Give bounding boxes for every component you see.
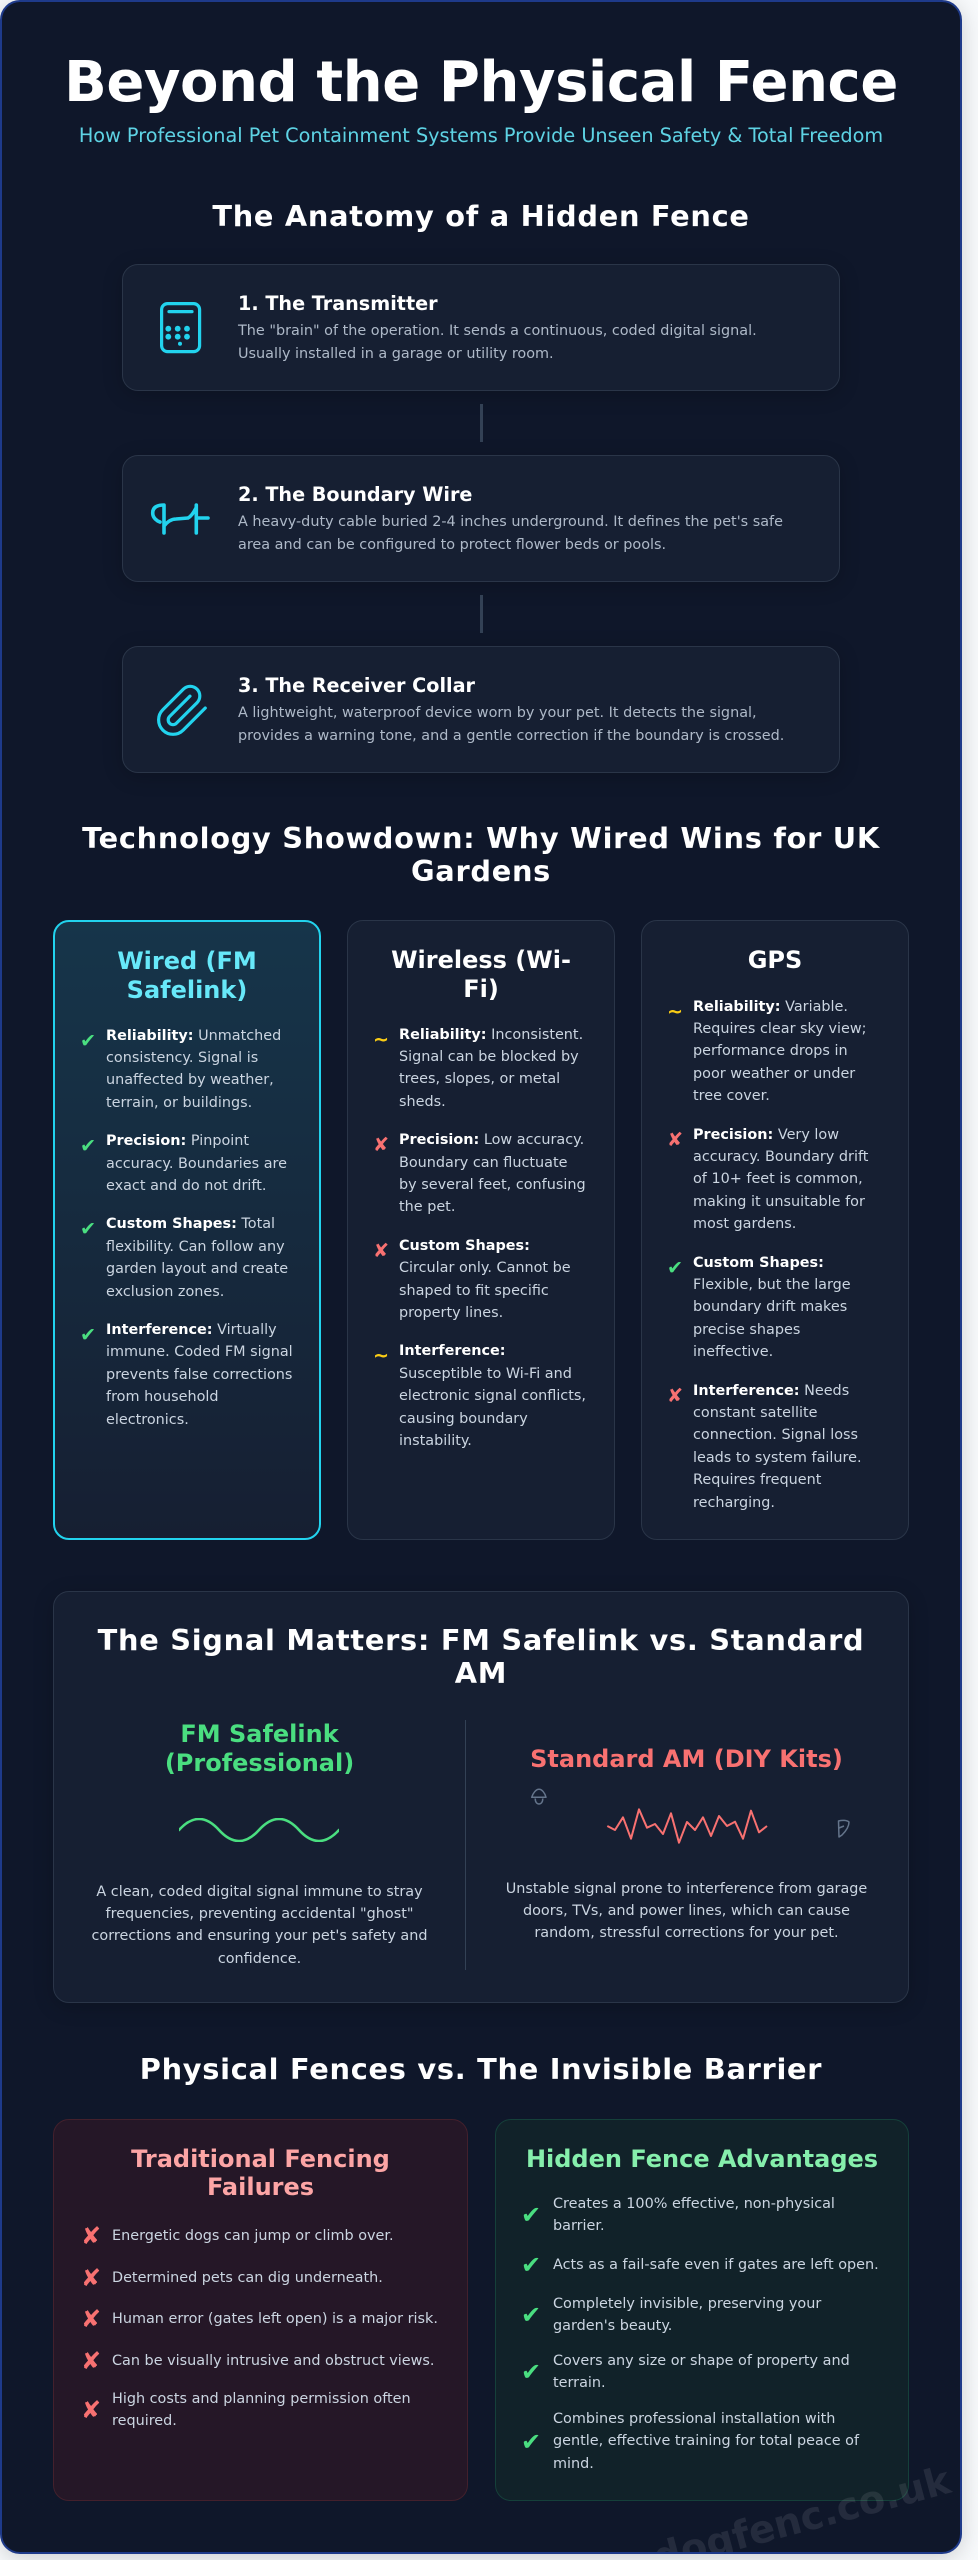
- feature list: terrain, or buildings.: [106, 1095, 252, 1111]
- failures list: ✘: [81, 2305, 101, 2333]
- feature list: trees, slopes, or metal: [399, 1071, 560, 1087]
- panel: GPS column: ✘: [667, 1384, 683, 1407]
- feature list: the pet.: [399, 1199, 455, 1215]
- failures list: Energetic dogs can jump or climb over.: [112, 2228, 394, 2244]
- feature list: Signal can be blocked by: [399, 1049, 579, 1065]
- feature list: from household: [106, 1389, 219, 1405]
- card description: [238, 323, 757, 362]
- panel heading: [131, 2144, 390, 2201]
- card title: 1. The Transmitter: [238, 292, 438, 314]
- feature list: consistency. Signal is: [106, 1050, 258, 1066]
- column heading: Wired (FM: [117, 947, 257, 975]
- column heading: Fi): [463, 975, 499, 1003]
- column heading: GPS: [748, 946, 802, 974]
- feature list: making it unsuitable for: [693, 1194, 865, 1210]
- feature list: flexibility. Can follow any: [106, 1239, 285, 1255]
- failures list: ✘: [81, 2396, 101, 2424]
- AM description: [506, 1880, 867, 1941]
- panel: boundary wire: [122, 455, 840, 582]
- feature list: tree cover.: [693, 1088, 770, 1104]
- feature list: recharging.: [693, 1495, 775, 1511]
- icon: boundary wire: [150, 503, 210, 535]
- card description: The "brain" of the operation. It sends a continuous, coded digital signal.: [238, 323, 757, 339]
- subtitle: How Professional Pet Containment Systems Provide Unseen Safety & Total Freedom: [79, 124, 883, 147]
- AM noisy signal: [606, 1808, 768, 1844]
- panel: GPS column: ~: [667, 1000, 683, 1022]
- feature list: [373, 1027, 586, 1449]
- heading: signal matters: [98, 1623, 864, 1690]
- advantages list: Combines professional installation with: [553, 2411, 835, 2427]
- AM description: Unstable signal prone to interference from garage: [506, 1880, 867, 1896]
- FM description: confidence.: [218, 1951, 301, 1967]
- FM description: A clean, coded digital signal immune to stray: [96, 1884, 423, 1900]
- feature list: Circular only. Cannot be: [399, 1260, 571, 1276]
- advantages list: ✔: [521, 2301, 541, 2329]
- feature list: accuracy. Boundary drift: [693, 1149, 868, 1165]
- panel: hidden fence advantages: [495, 2119, 909, 2501]
- advantages list: ✔: [521, 2201, 541, 2229]
- panel: signal comparison: [53, 1591, 909, 2003]
- icon: paperclip collar: [157, 684, 207, 736]
- feature list: Susceptible to Wi-Fi and: [399, 1366, 572, 1382]
- panel: GPS column: [641, 920, 909, 1540]
- feature list: most gardens.: [693, 1216, 796, 1232]
- feature list: Flexible, but the large: [693, 1277, 851, 1293]
- feature list: accuracy. Boundaries are: [106, 1156, 287, 1172]
- panel: wireless column: ~: [373, 1028, 389, 1051]
- advantages list: ✔: [521, 2358, 541, 2386]
- panel: wireless column: ✘: [373, 1133, 389, 1156]
- feature list: causing boundary: [399, 1411, 528, 1427]
- feature list: leads to system failure.: [693, 1450, 862, 1466]
- panel: wireless column: [347, 920, 615, 1540]
- panel heading: Traditional Fencing: [131, 2144, 390, 2172]
- column heading: [117, 947, 257, 1004]
- FM heading: [165, 1720, 354, 1777]
- panel: wired column: [53, 920, 321, 1540]
- advantages list: barrier.: [553, 2218, 605, 2234]
- panel: wired column: ✔: [80, 1134, 96, 1157]
- title: Beyond the Physical Fence: [64, 50, 898, 115]
- feature list: boundary drift makes: [693, 1299, 847, 1315]
- feature list: exclusion zones.: [106, 1284, 224, 1300]
- feature list: immune. Coded FM signal: [106, 1344, 293, 1360]
- feature list: Interference:: [399, 1343, 506, 1359]
- feature list: electronic signal conflicts,: [399, 1388, 586, 1404]
- feature list: [667, 998, 868, 1511]
- failures list: ✘: [81, 2222, 101, 2250]
- feature list: constant satellite: [693, 1405, 817, 1421]
- column heading: Safelink): [127, 976, 247, 1004]
- advantages list: garden's beauty.: [553, 2318, 672, 2334]
- feature list: Precision: Low accuracy.: [399, 1132, 584, 1148]
- feature list: Reliability: Variable.: [693, 998, 848, 1014]
- panel: wireless column: ~: [373, 1344, 389, 1367]
- feature list: sheds.: [399, 1094, 446, 1110]
- feature list: precise shapes: [693, 1322, 800, 1338]
- advantages list: [521, 2196, 879, 2472]
- advantages list: Creates a 100% effective, non-physical: [553, 2196, 835, 2212]
- feature list: [80, 1028, 293, 1428]
- card description: area and can be configured to protect flower beds or pools.: [238, 537, 666, 553]
- icon: transmitter: [160, 302, 202, 354]
- panel: wired column: ✔: [80, 1028, 96, 1052]
- advantages list: Acts as a fail-safe even if gates are left open.: [553, 2257, 879, 2273]
- failures list: ✘: [81, 2264, 101, 2292]
- card description: Usually installed in a garage or utility room.: [238, 346, 554, 362]
- feature list: of 10+ feet is common,: [693, 1171, 863, 1187]
- AM heading: Standard AM (DIY Kits): [530, 1745, 843, 1773]
- feature list: prevents false corrections: [106, 1367, 292, 1383]
- panel: transmitter: [122, 264, 840, 391]
- panel: wired column: ✔: [80, 1323, 96, 1346]
- feature list: Requires frequent: [693, 1472, 821, 1488]
- advantages list: Completely invisible, preserving your: [553, 2296, 821, 2312]
- heading: technology showdown: Gardens: [411, 854, 551, 888]
- feature list: performance drops in: [693, 1043, 848, 1059]
- card description: A heavy-duty cable buried 2-4 inches underground. It defines the pet's safe: [238, 514, 783, 530]
- advantages list: mind.: [553, 2456, 594, 2472]
- column heading: [391, 946, 571, 1003]
- feature list: garden layout and create: [106, 1261, 288, 1277]
- feature list: poor weather or under: [693, 1066, 855, 1082]
- FM description: corrections and ensuring your pet's safety and: [91, 1928, 428, 1944]
- feature list: Custom Shapes:: [693, 1255, 824, 1271]
- AM description: doors, TVs, and power lines, which can cause: [523, 1903, 850, 1919]
- advantages list: ✔: [521, 2428, 541, 2456]
- FM heading: (Professional): [165, 1749, 354, 1777]
- feature list: electronics.: [106, 1412, 189, 1428]
- panel heading: Failures: [207, 2173, 314, 2201]
- failures list: ✘: [81, 2347, 101, 2375]
- icon: interference source left: [531, 1788, 547, 1805]
- failures list: Can be visually intrusive and obstruct views.: [112, 2353, 435, 2369]
- column heading: Wireless (Wi-: [391, 946, 571, 974]
- feature list: shaped to fit specific: [399, 1283, 549, 1299]
- card description: provides a warning tone, and a gentle correction if the boundary is crossed.: [238, 728, 784, 744]
- feature list: ineffective.: [693, 1344, 773, 1360]
- card title: 3. The Receiver Collar: [238, 674, 475, 696]
- panel: wireless column: ✘: [373, 1239, 389, 1262]
- panel: receiver collar: [122, 646, 840, 773]
- connector line: [480, 595, 483, 633]
- feature list: connection. Signal loss: [693, 1427, 858, 1443]
- feature list: Reliability: Unmatched: [106, 1028, 281, 1044]
- panel: GPS column: ✔: [667, 1256, 683, 1279]
- divider: [465, 1720, 466, 1970]
- advantages list: gentle, effective training for total peace of: [553, 2433, 859, 2449]
- failures list: Human error (gates left open) is a major risk.: [112, 2311, 438, 2327]
- FM description: frequencies, preventing accidental "ghost": [106, 1906, 413, 1922]
- failures list: Determined pets can dig underneath.: [112, 2270, 383, 2286]
- feature list: instability.: [399, 1433, 472, 1449]
- FM signal wave: [179, 1818, 339, 1842]
- feature list: Precision: Pinpoint: [106, 1133, 249, 1149]
- FM description: [91, 1884, 428, 1967]
- feature list: Boundary can fluctuate: [399, 1155, 567, 1171]
- icon: interference source right: [838, 1820, 850, 1838]
- panel heading: Hidden Fence Advantages: [526, 2144, 878, 2172]
- AM description: random, stressful corrections for your pet.: [534, 1925, 839, 1941]
- feature list: Interference: Virtually: [106, 1322, 277, 1338]
- panel: traditional fencing failures: [53, 2119, 468, 2501]
- card description: [238, 514, 783, 553]
- feature list: Precision: Very low: [693, 1127, 839, 1143]
- card title: 2. The Boundary Wire: [238, 482, 472, 506]
- feature list: property lines.: [399, 1305, 503, 1321]
- feature list: exact and do not drift.: [106, 1178, 266, 1194]
- feature list: Interference: Needs: [693, 1383, 849, 1399]
- panel: GPS column: ✘: [667, 1128, 683, 1151]
- heading: signal matters: AM: [455, 1656, 507, 1690]
- advantages list: terrain.: [553, 2375, 606, 2391]
- failures list: required.: [112, 2413, 177, 2429]
- feature list: Custom Shapes: Total: [106, 1216, 275, 1232]
- feature list: Custom Shapes:: [399, 1238, 530, 1254]
- panel: wired column: ✔: [80, 1217, 96, 1240]
- failures list: High costs and planning permission often: [112, 2391, 411, 2407]
- feature list: Reliability: Inconsistent.: [399, 1027, 583, 1043]
- feature list: by several feet, confusing: [399, 1177, 586, 1193]
- heading: technology showdown: [82, 821, 880, 888]
- feature list: unaffected by weather,: [106, 1072, 274, 1088]
- heading: technology showdown: Technology Showdown: Why Wired Wins for UK: [82, 821, 880, 855]
- FM heading: FM Safelink: [180, 1720, 339, 1748]
- heading: anatomy: The Anatomy of a Hidden Fence: [212, 199, 750, 233]
- advantages list: ✔: [521, 2251, 541, 2279]
- connector line: [480, 404, 483, 442]
- card description: A lightweight, waterproof device worn by your pet. It detects the signal,: [238, 705, 757, 721]
- heading: signal matters: The Signal Matters: FM Safelink vs. Standard: [98, 1623, 864, 1657]
- feature list: Requires clear sky view;: [693, 1021, 866, 1037]
- failures list: [81, 2222, 438, 2429]
- card description: [238, 705, 784, 744]
- advantages list: Covers any size or shape of property and: [553, 2353, 850, 2369]
- heading: physical vs invisible: Physical Fences vs. The Invisible Barrier: [140, 2052, 822, 2086]
